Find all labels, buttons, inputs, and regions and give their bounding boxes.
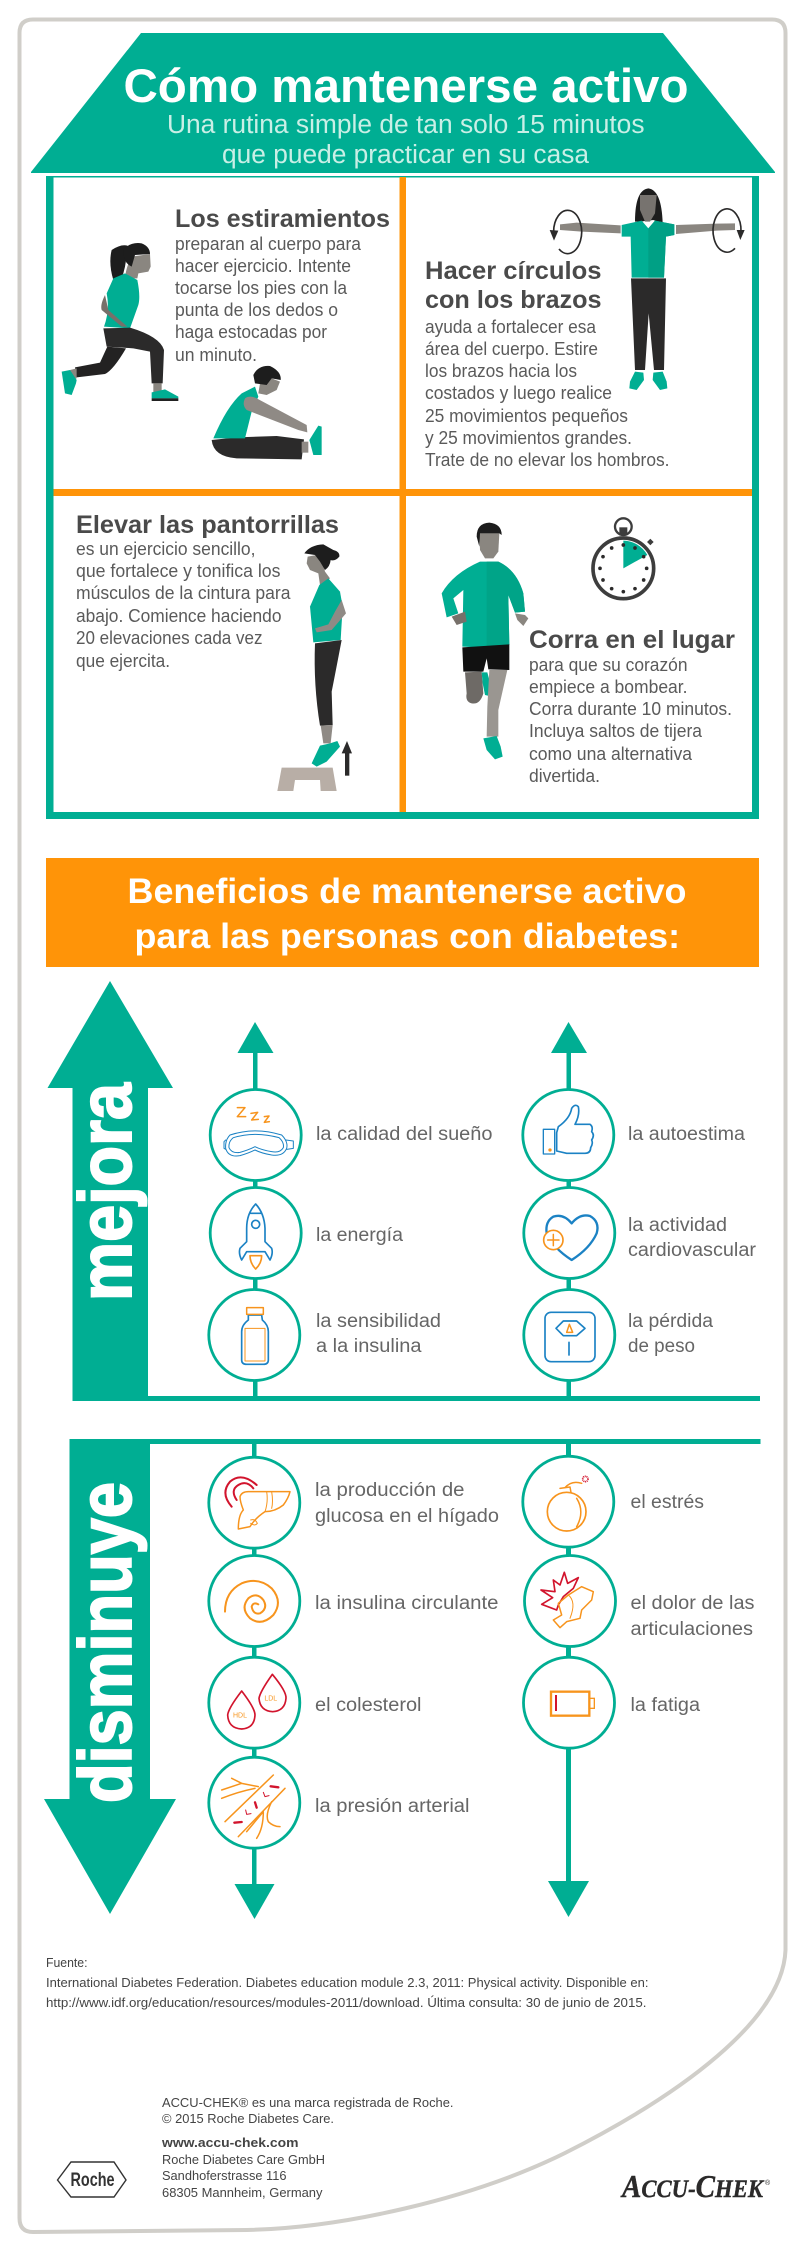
legal and address text: Roche Diabetes Care GmbH: [162, 2152, 325, 2167]
icon: cholesterol drops: [209, 1657, 300, 1748]
legal and address text: © 2015 Roche Diabetes Care.: [162, 2111, 334, 2126]
panel: los estiramientos text: punta de los dedos o: [175, 300, 338, 320]
banner: beneficios: para las personas con diabetes:: [134, 917, 680, 956]
arrow: disminuye: [44, 1439, 760, 1914]
icon: left rotation arrow: [550, 210, 582, 254]
labels: disminuye column 2: el dolor de las: [630, 1593, 754, 1614]
house roof with title: [31, 33, 775, 173]
banner: beneficios: Beneficios de mantenerse activo: [128, 872, 686, 911]
icon: stopwatch: [593, 518, 654, 599]
labels: disminuye column 1: glucosa en el hígado: [315, 1506, 499, 1527]
panel: elevar las pantorrillas text: Elevar las pantorrillas: [76, 511, 339, 539]
source citation: Fuente:: [46, 1955, 88, 1970]
icon: insulin vial: [209, 1290, 300, 1380]
arrow: up: [342, 741, 352, 776]
panel: hacer círculos text: Hacer círculos: [425, 257, 602, 285]
arrow: disminuye: disminuye: [64, 1482, 147, 1803]
panel: los estiramientos text: [175, 205, 390, 365]
panel: elevar las pantorrillas text: [76, 511, 339, 671]
labels: disminuye column 1: la producción de: [315, 1480, 464, 1501]
panel: corra en el lugar text: Corra durante 10 minutos.: [529, 699, 732, 719]
arrow: mejora column 2: [551, 1022, 587, 1398]
labels: mejora column 1: la sensibilidad: [316, 1311, 441, 1332]
icon: low battery: [524, 1657, 614, 1748]
panel: hacer círculos text: los brazos hacia los: [425, 361, 577, 381]
panel: hacer círculos text: [425, 257, 670, 470]
panel: los estiramientos text: Los estiramientos: [175, 205, 390, 233]
labels: mejora column 1: [316, 1124, 492, 1357]
panel: corra en el lugar text: Incluya saltos de tijera: [529, 721, 703, 741]
icon: bomb: [523, 1456, 614, 1547]
labels: mejora column 2: la autoestima: [628, 1124, 745, 1145]
panel: elevar las pantorrillas text: músculos de la cintura para: [76, 583, 291, 603]
figure: woman doing calf raise on step: [277, 544, 352, 791]
logo: Accu-Chek: ACCU-CHEK: [620, 2168, 765, 2204]
logo: Accu-Chek: ®: [765, 2179, 771, 2187]
source citation: International Diabetes Federation. Diabetes education module 2.3, 2011: Physical activity. Disponible en:: [46, 1975, 648, 1990]
labels: mejora column 1: la calidad del sueño: [316, 1124, 492, 1145]
logo: Roche: Roche: [70, 2170, 114, 2191]
icon: heart: [524, 1188, 615, 1278]
panel: corra en el lugar text: Corra en el lugar: [529, 626, 735, 654]
legal and address text: [161, 2095, 454, 2200]
subtitle: [167, 111, 644, 169]
legal and address text: ACCU-CHEK® es una marca registrada de Roche.: [162, 2095, 454, 2110]
labels: mejora column 2: la pérdida: [628, 1311, 713, 1332]
icon: joint pain: [524, 1556, 616, 1646]
panel: elevar las pantorrillas text: abajo. Comience haciendo: [76, 606, 282, 626]
panel: hacer círculos text: área del cuerpo. Estire: [425, 339, 598, 359]
panel: los estiramientos text: un minuto.: [175, 345, 257, 365]
panel: hacer círculos text: ayuda a fortalecer esa: [425, 317, 597, 337]
labels: disminuye column 2: articulaciones: [630, 1619, 753, 1640]
icon: weighing scale: [524, 1290, 615, 1380]
panel: hacer círculos text: con los brazos: [425, 286, 602, 314]
labels: mejora column 2: la actividad: [628, 1215, 727, 1236]
figure: man seated stretching: [212, 366, 322, 459]
labels: mejora column 2: cardiovascular: [628, 1240, 757, 1261]
panel: corra en el lugar text: para que su corazón: [529, 655, 688, 675]
panel: los estiramientos text: haga estocadas por: [175, 322, 327, 342]
panel: elevar las pantorrillas text: 20 elevaciones cada vez: [76, 628, 262, 648]
panel: corra en el lugar text: como una alternativa: [529, 744, 693, 764]
labels: mejora column 1: a la insulina: [316, 1336, 422, 1357]
panel: los estiramientos text: preparan al cuerpo para: [175, 234, 362, 254]
icon: thumbs up: [523, 1090, 614, 1180]
arrow: disminuye column 2: [548, 1442, 589, 1917]
panel: corra en el lugar text: divertida.: [529, 766, 600, 786]
icon: rocket: [210, 1188, 301, 1278]
figure: woman lunging: [62, 243, 178, 401]
panel: los estiramientos text: hacer ejercicio. Intente: [175, 256, 351, 276]
panel: elevar las pantorrillas text: que ejercita.: [76, 651, 170, 671]
labels: disminuye column 1: la insulina circulante: [315, 1593, 498, 1614]
source citation: [46, 1955, 648, 2010]
arrow: mejora: mejora: [64, 1082, 147, 1301]
panel: corra en el lugar text: empiece a bombear.: [529, 677, 688, 697]
logo: Roche: [58, 2162, 126, 2197]
panel: hacer círculos text: Trate de no elevar los hombros.: [425, 450, 670, 470]
panel: hacer círculos text: costados y luego realice: [425, 383, 612, 403]
legal and address text: Sandhoferstrasse 116: [162, 2168, 286, 2183]
legal and address text: 68305 Mannheim, Germany: [162, 2185, 323, 2200]
subtitle: Una rutina simple de tan solo 15 minutos: [167, 111, 644, 139]
panel: elevar las pantorrillas text: es un ejercicio sencillo,: [76, 539, 256, 559]
source citation: http://www.idf.org/education/resources/modules-2011/download. Última consulta: 30 de junio de 2015.: [46, 1995, 646, 2010]
arrow: disminuye column 1: [234, 1442, 274, 1919]
labels: disminuye column 1: la presión arterial: [315, 1796, 470, 1817]
legal and address text: www.accu-chek.com: [161, 2135, 298, 2150]
icon: right rotation arrow: [713, 209, 745, 252]
banner: beneficios: [46, 858, 759, 967]
panel: corra en el lugar text: [529, 626, 735, 786]
icon: arteries: [209, 1757, 300, 1848]
labels: mejora column 1: la energía: [316, 1225, 403, 1246]
panel: elevar las pantorrillas text: que fortalece y tonifica los: [76, 561, 280, 581]
step: [277, 768, 337, 791]
arrow: mejora column 1: [238, 1022, 274, 1398]
icon: liver: [209, 1457, 300, 1548]
labels: mejora column 2: [628, 1124, 757, 1357]
house walls and dividers: [46, 176, 759, 819]
icon: sleep mask: [210, 1090, 301, 1180]
panel: hacer círculos text: 25 movimientos pequeños: [425, 406, 628, 426]
panel: los estiramientos text: tocarse los pies con la: [175, 278, 348, 298]
labels: mejora column 2: de peso: [628, 1336, 695, 1357]
labels: disminuye column 2: el estrés: [630, 1492, 704, 1513]
figure: man running in place: [442, 523, 528, 759]
figure: woman with arms extended: [550, 188, 745, 390]
arrow: mejora: [48, 981, 760, 1401]
icon: cholesterol drops: LDL: [264, 1696, 277, 1703]
panel: hacer círculos text: y 25 movimientos grandes.: [425, 428, 632, 448]
icon: insulin spiral: [209, 1556, 300, 1646]
labels: disminuye column 1: el colesterol: [315, 1695, 422, 1716]
labels: disminuye column 1: [315, 1480, 499, 1817]
subtitle: que puede practicar en su casa: [222, 141, 590, 169]
labels: disminuye column 2: la fatiga: [630, 1695, 700, 1716]
title: Cómo mantenerse activo: [124, 60, 688, 113]
icon: cholesterol drops: HDL: [233, 1713, 247, 1720]
labels: disminuye column 2: [630, 1492, 754, 1716]
